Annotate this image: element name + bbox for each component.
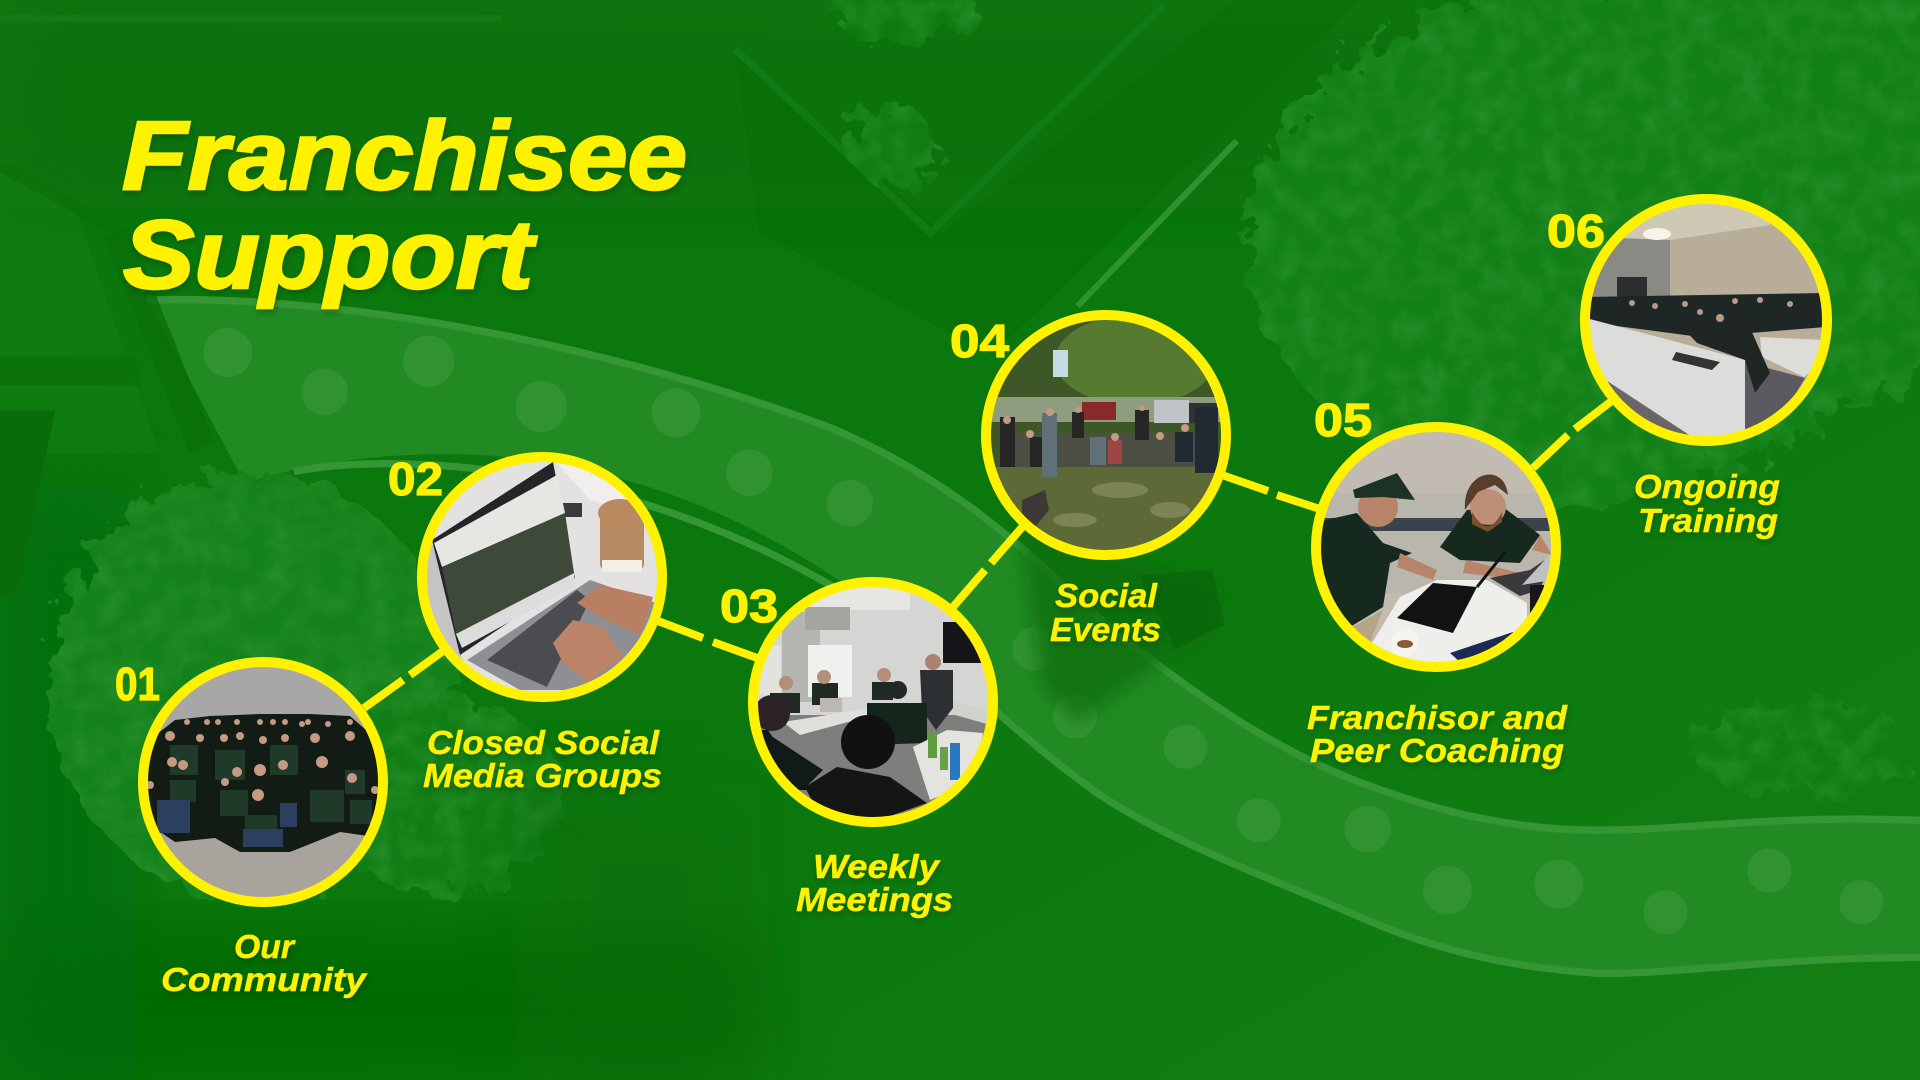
number: 04 (950, 315, 1009, 367)
label: Closed Social (427, 724, 660, 761)
label: Events (1050, 611, 1161, 648)
label (1307, 699, 1568, 769)
label (1050, 577, 1161, 648)
title (122, 101, 687, 309)
connector: 02 to 03 (658, 621, 760, 659)
ring (143, 662, 383, 902)
label: Weekly (813, 848, 941, 885)
photo: training ballroom (1586, 200, 1826, 440)
photo: meeting room (753, 582, 993, 825)
number: 02 (388, 453, 443, 505)
step 06: Ongoing Training (1547, 199, 1827, 539)
label: Media Groups (423, 757, 662, 794)
label: Ongoing (1634, 468, 1780, 505)
connector: 01 to 02 (364, 646, 450, 708)
connector: 04 to 05 (1222, 475, 1323, 510)
label: Franchisor and (1307, 699, 1568, 736)
ring (1316, 427, 1556, 667)
connector: 03 to 04 (953, 525, 1024, 607)
ring (1585, 199, 1827, 441)
label (1634, 468, 1780, 539)
step 03: Weekly Meetings (720, 580, 993, 918)
photo: team group shot (143, 662, 383, 904)
label: Meetings (796, 881, 953, 918)
photo: outdoor gathering (986, 315, 1226, 557)
label (161, 928, 368, 998)
step 02: Closed Social Media Groups (388, 453, 662, 794)
label: Our (234, 928, 296, 965)
label: Training (1638, 502, 1778, 539)
number: 01 (115, 658, 160, 710)
connector: 05 to 06 (1533, 400, 1613, 468)
ring (422, 457, 662, 697)
photo: two men coaching (1321, 432, 1551, 662)
step 04: Social Events (950, 315, 1226, 648)
ring (753, 582, 993, 822)
number: 05 (1314, 394, 1372, 446)
label: Community (161, 961, 368, 998)
photo: laptop and coffee (422, 457, 662, 697)
label (796, 848, 953, 918)
number: 06 (1547, 205, 1605, 257)
label: Peer Coaching (1310, 732, 1564, 769)
step 01: Our Community (115, 658, 383, 998)
number: 03 (720, 580, 778, 632)
title: Franchisee (122, 101, 687, 210)
label (423, 724, 662, 794)
label: Social (1055, 577, 1158, 614)
step 05: Franchisor and Peer Coaching (1307, 394, 1568, 769)
ring (986, 315, 1226, 555)
title: Support (123, 200, 537, 309)
